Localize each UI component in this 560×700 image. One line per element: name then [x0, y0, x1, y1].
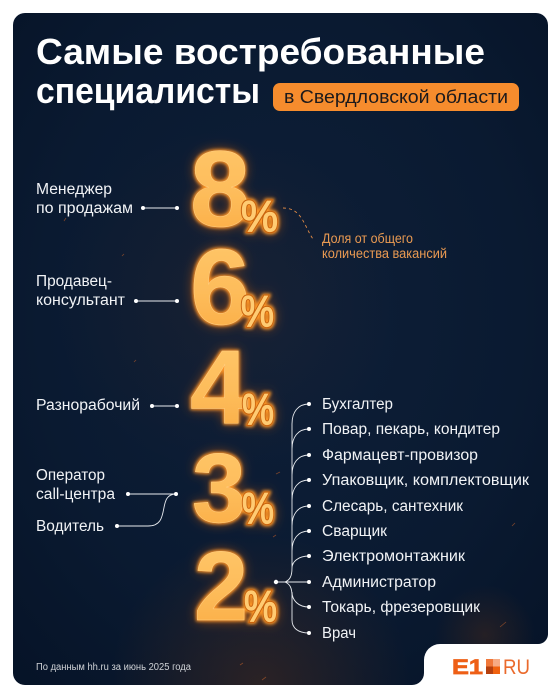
stat: 4 percent — [190, 329, 274, 446]
label: call-centre operator and driver: call-центра — [36, 486, 115, 503]
stat: 2 percent — [194, 531, 277, 641]
stat: 4 percent: % — [242, 385, 274, 434]
logo: E1.RU — [452, 656, 530, 679]
callout: share of all vacancies: количества вакансий — [322, 246, 447, 261]
stat: 8 percent — [190, 128, 278, 249]
label: call-centre operator and driver — [36, 467, 178, 535]
list: 2 percent professions: Токарь, фрезеровщик — [322, 599, 480, 616]
logo: E1.RU: RU — [503, 656, 530, 679]
list: 2 percent professions: Бухгалтер — [322, 396, 393, 413]
stat: 3 percent: % — [242, 484, 274, 533]
label: sales consultant: консультант — [36, 292, 125, 309]
callout: share of all vacancies: Доля от общего — [322, 231, 413, 246]
stat: 2 percent: 2 — [194, 531, 248, 641]
stat: 4 percent: 4 — [190, 329, 248, 446]
source note: По данным hh.ru за июнь 2025 года — [36, 662, 191, 673]
stat: 3 percent: 3 — [192, 433, 246, 543]
list: 2 percent professions: Слесарь, сантехник — [322, 498, 463, 515]
label: call-centre operator and driver: Оператор — [36, 467, 105, 484]
list: 2 percent professions: Электромонтажник — [322, 548, 465, 565]
subtitle badge — [273, 83, 519, 111]
stat: 2 percent: % — [244, 582, 277, 631]
stat: 3 percent — [192, 433, 274, 543]
list: 2 percent professions: Сварщик — [322, 523, 387, 540]
label: sales manager — [36, 181, 179, 217]
label: general worker: Разнорабочий — [36, 397, 140, 414]
callout: share of all vacancies — [283, 208, 447, 261]
title: Самые востребованные — [36, 31, 485, 72]
stat: 8 percent: % — [241, 192, 278, 241]
list: 2 percent professions: Упаковщик, комплектовщик — [322, 472, 529, 489]
list: 2 percent professions — [322, 396, 529, 642]
connector tree for 2 percent — [274, 402, 311, 635]
title: специалисты — [36, 70, 260, 111]
stat: 4 percent: % — [242, 385, 274, 434]
stat: 8 percent: % — [241, 192, 278, 241]
list: 2 percent professions: Повар, пекарь, кондитер — [322, 421, 500, 438]
list: 2 percent professions: Фармацевт-провизор — [322, 447, 478, 464]
stat: 6 percent: % — [241, 287, 274, 336]
stat: 6 percent: % — [241, 287, 274, 336]
label: call-centre operator and driver: Водитель — [36, 518, 104, 535]
stat: 3 percent: % — [242, 484, 274, 533]
label: sales consultant: Продавец- — [36, 273, 112, 290]
stat: 8 percent: 8 — [190, 128, 250, 249]
label: sales manager: Менеджер — [36, 181, 112, 198]
label: sales consultant — [36, 273, 179, 309]
title — [36, 31, 485, 111]
list: 2 percent professions: Врач — [322, 625, 356, 642]
label: sales manager: по продажам — [36, 200, 133, 217]
stat: 6 percent: 6 — [190, 226, 250, 347]
stat: 2 percent: % — [244, 582, 277, 631]
subtitle badge: в Свердловской области — [284, 86, 508, 107]
list: 2 percent professions: Администратор — [322, 574, 436, 591]
logo: E1.RU: E1 — [452, 656, 483, 679]
